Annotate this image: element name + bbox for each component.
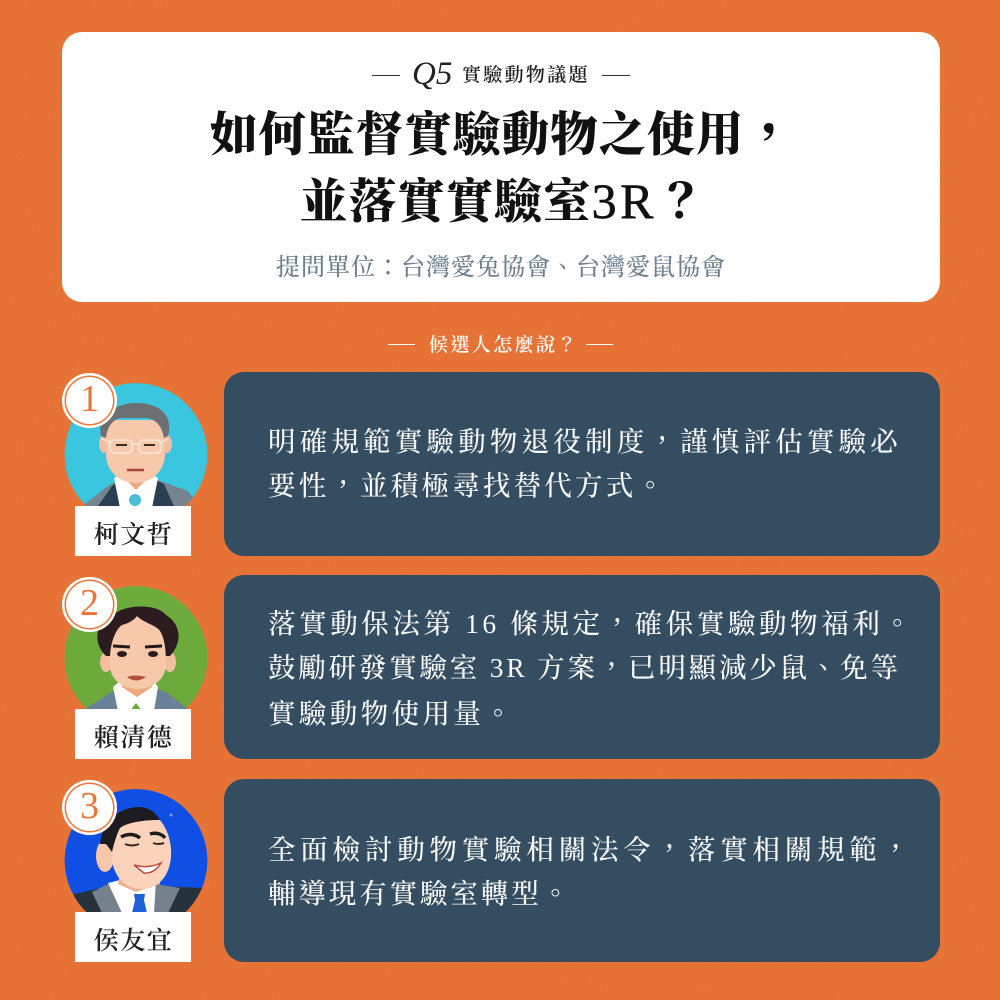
eyebrow: Q5 topic: 實驗動物議題	[462, 65, 590, 86]
answer panel 2: 落實動保法第 16 條規定，確保實驗動物福利。	[268, 608, 915, 639]
questioner: 提問單位：台灣愛兔協會、台灣愛鼠協會	[276, 255, 726, 281]
answer panel 3	[224, 779, 940, 962]
name label	[75, 506, 191, 556]
title: 並落實實驗室3R？	[300, 173, 706, 229]
name label: 賴清德	[94, 725, 173, 752]
portrait: 侯友宜	[64, 789, 208, 912]
candidate 3	[62, 779, 940, 962]
portrait: 賴清德	[64, 586, 208, 709]
subheading: 候選人怎麼說？	[429, 335, 579, 356]
number badge 3	[62, 780, 117, 835]
title: 如何監督實驗動物之使用，	[210, 110, 793, 162]
answer panel 1	[224, 372, 940, 556]
answer panel 2: 實驗動物使用量。	[268, 698, 515, 729]
number badge 3: 3	[80, 785, 99, 827]
answer panel 2	[224, 575, 940, 759]
number badge 2: 2	[80, 582, 99, 624]
candidate 1	[62, 372, 940, 556]
number badge 1: 1	[80, 378, 99, 420]
number badge 1	[62, 373, 117, 428]
name label: 柯文哲	[94, 522, 173, 549]
panel: question header	[62, 32, 940, 302]
answer panel 3: 全面檢討動物實驗相關法令，落實相關規範，	[268, 834, 914, 865]
name label	[75, 912, 191, 962]
answer panel 1: 要性，並積極尋找替代方式。	[268, 470, 667, 501]
answer panel 3: 輔導現有實驗室轉型。	[268, 878, 572, 909]
number badge 2	[62, 577, 117, 632]
name label: 侯友宜	[94, 928, 173, 955]
portrait: 柯文哲	[64, 383, 208, 506]
eyebrow: Q5 topic: Q5	[412, 56, 452, 92]
answer panel 2: 鼓勵研發實驗室 3R 方案，已明顯減少鼠、免等	[268, 652, 901, 683]
title	[210, 110, 793, 229]
candidate 2	[62, 575, 940, 759]
name label	[75, 709, 191, 759]
answer panel 1: 明確規範實驗動物退役制度，謹慎評估實驗必	[268, 426, 902, 457]
eyebrow: Q5 topic	[372, 56, 630, 92]
